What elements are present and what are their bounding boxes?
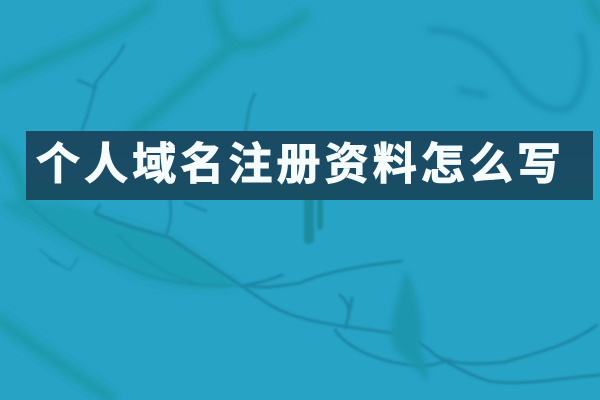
title: 个人域名注册资料怎么写 [36, 140, 565, 189]
hanging catkins [304, 198, 323, 244]
bird silhouette on branch [391, 270, 428, 382]
title banner [26, 131, 593, 200]
